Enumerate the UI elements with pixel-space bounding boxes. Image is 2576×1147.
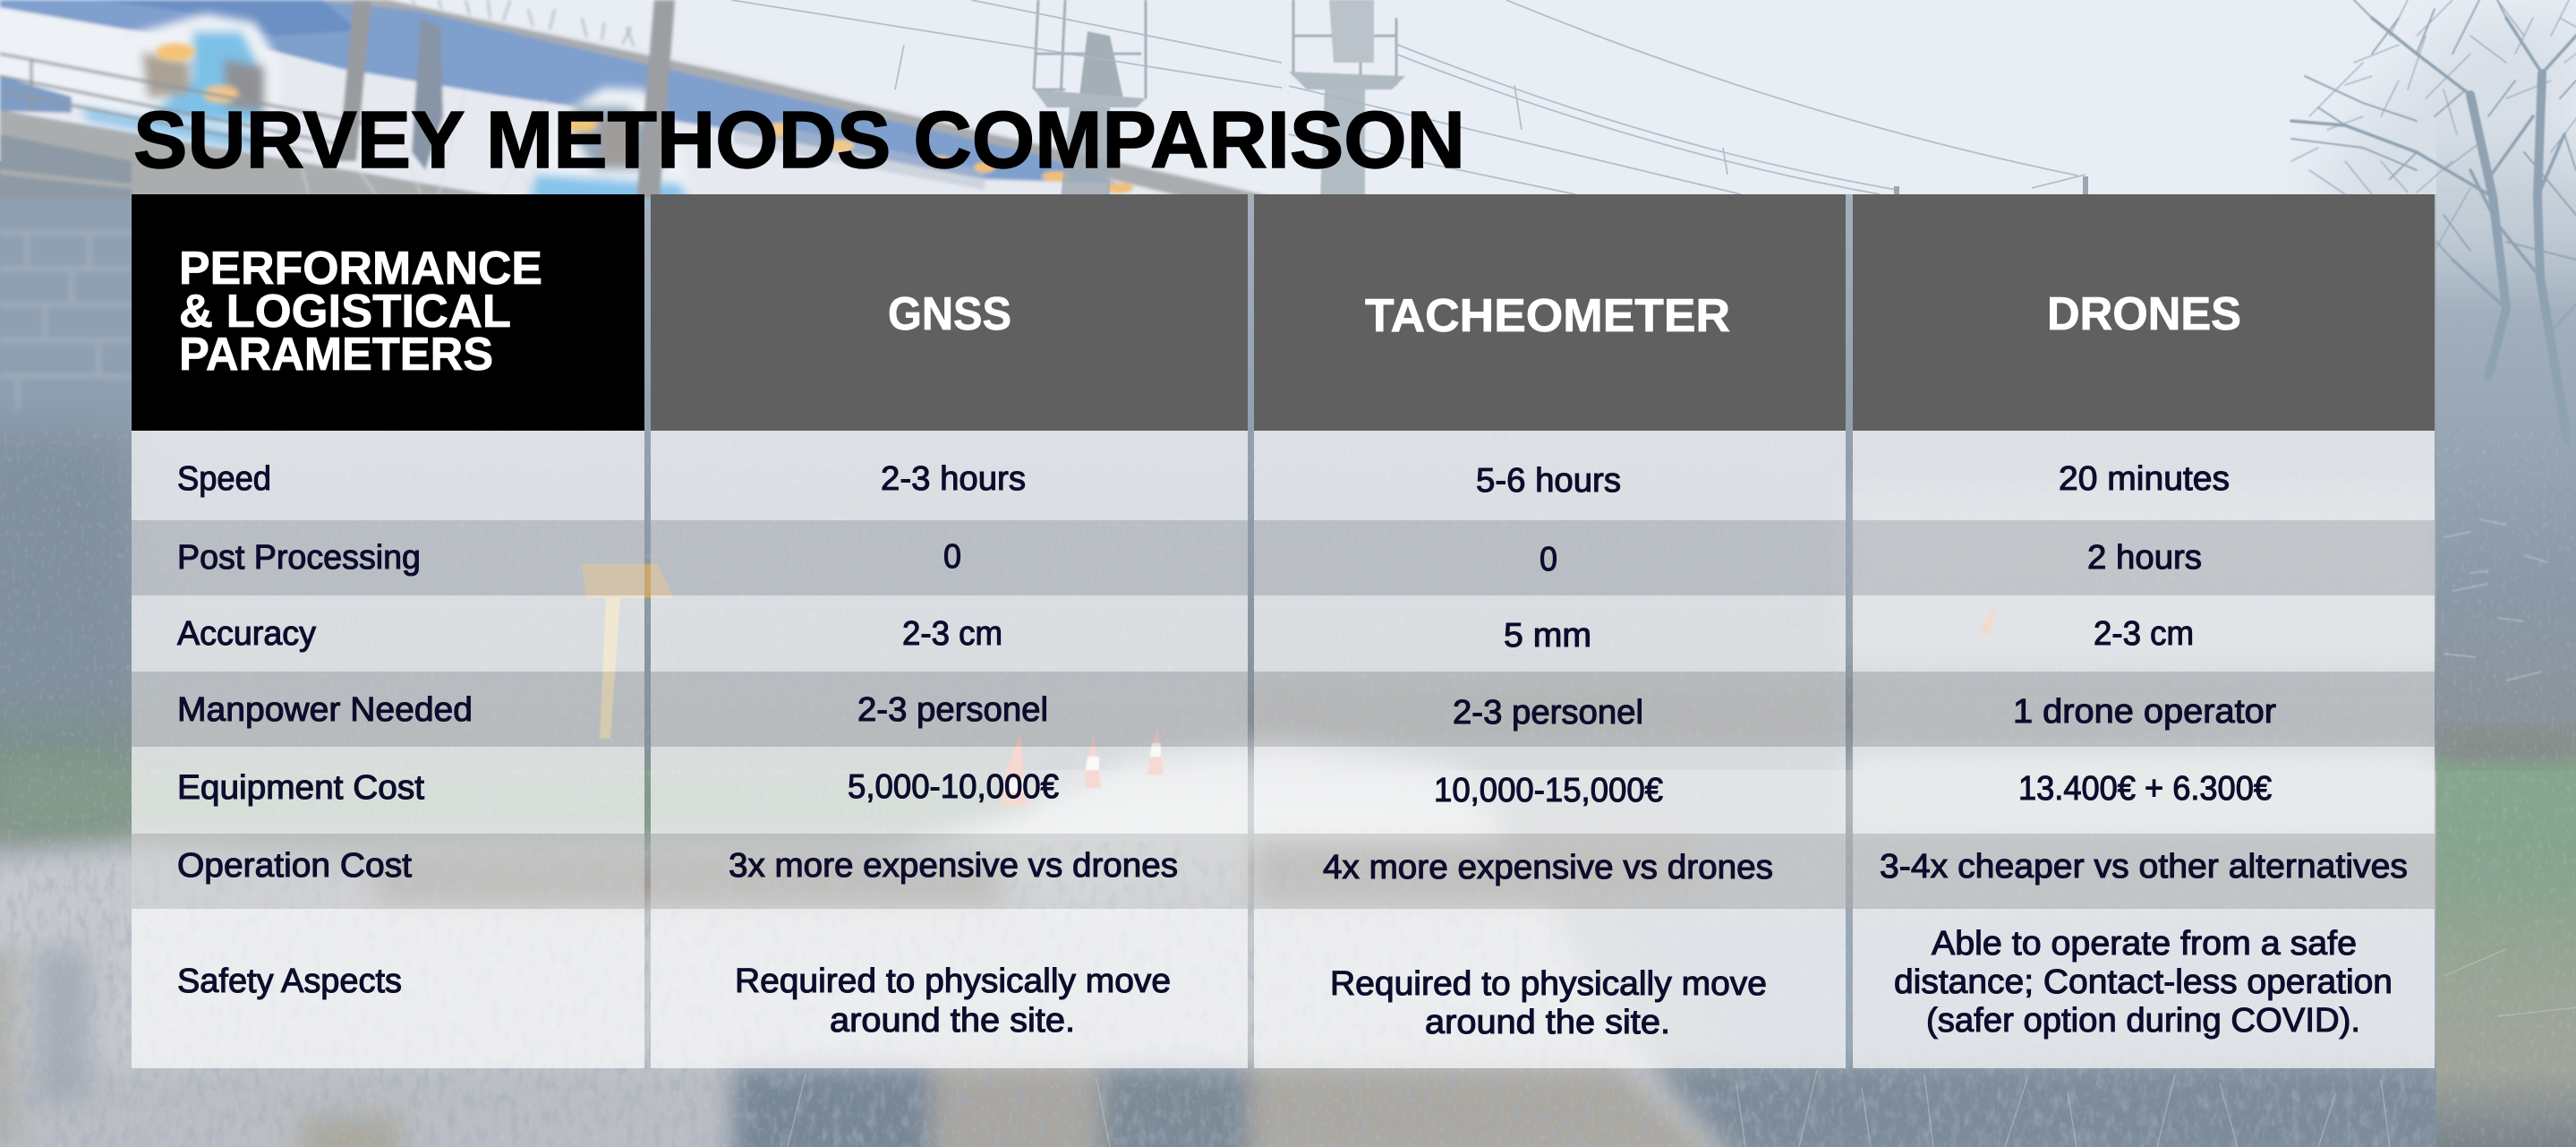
tree crown haze	[2327, 18, 2576, 251]
grey roof	[315, 0, 1282, 199]
row: Manpower Needed: 2-3 personel	[857, 691, 1048, 729]
row: Safety Aspects: Safety Aspects	[177, 963, 402, 1000]
row: Speed: 20 minutes	[2059, 460, 2230, 498]
row: Speed: Speed	[177, 460, 271, 498]
title: SURVEY METHODS COMPARISON	[133, 96, 1465, 185]
header: Tacheometer: TACHEOMETER	[1365, 290, 1730, 342]
railing	[0, 54, 376, 152]
row: Speed	[132, 431, 2435, 520]
row: Operation Cost: 3-4x cheaper vs other alternatives	[1880, 848, 2408, 886]
blue band	[0, 0, 1119, 184]
header: performance and logistical parameters: PARAMETERS	[179, 329, 493, 381]
row: Speed: 2-3 hours	[881, 460, 1026, 498]
green strip and grass behind table	[0, 761, 1029, 837]
dry grass stems	[788, 949, 2576, 1147]
row: Equipment Cost: 13.400€ + 6.300€	[2018, 770, 2272, 808]
poles	[338, 0, 371, 161]
row: Equipment Cost: 5,000-10,000€	[848, 768, 1059, 806]
bridge deck	[0, 110, 515, 199]
signal towers	[1034, 0, 1405, 199]
row: Post Processing: Post Processing	[177, 539, 421, 577]
header: GNSS: GNSS	[888, 288, 1011, 340]
row: Equipment Cost: Equipment Cost	[177, 769, 424, 807]
comparison table	[132, 194, 2435, 1068]
row: Operation Cost: 3x more expensive vs drones	[729, 847, 1178, 885]
row: Safety Aspects: distance; Contact-less operation	[1894, 963, 2393, 1001]
header: performance and logistical parameters	[132, 194, 644, 431]
row: Post Processing: 0	[943, 538, 961, 576]
pale leaves in the hedge	[2444, 519, 2547, 680]
sign post	[582, 564, 673, 739]
header: performance and logistical parameters: PERFORMANCE	[179, 243, 542, 295]
row: Accuracy: Accuracy	[177, 615, 316, 653]
row: Accuracy: 2-3 cm	[902, 615, 1002, 653]
row: Equipment Cost: 10,000-15,000€	[1434, 772, 1663, 809]
train front	[81, 13, 282, 152]
row: Safety Aspects: Required to physically move	[1330, 965, 1767, 1003]
row: Operation Cost	[132, 834, 2435, 909]
right side fog and trees	[2436, 116, 2576, 770]
row: Safety Aspects: around the site.	[1425, 1004, 1670, 1041]
header: Drones: DRONES	[2047, 288, 2241, 340]
grain texture	[0, 430, 2576, 1147]
header: Tacheometer	[1254, 194, 1846, 431]
overhead wires	[731, 0, 2086, 194]
row: Post Processing: 0	[1540, 541, 1557, 578]
white carriage side	[0, 9, 125, 116]
right bank behind table	[1611, 484, 2444, 1083]
row: Post Processing	[132, 520, 2435, 595]
row: Accuracy: 5 mm	[1504, 617, 1591, 655]
row: Safety Aspects: Able to operate from a safe	[1932, 925, 2357, 963]
header: Drones	[1853, 194, 2435, 431]
row: Equipment Cost	[132, 747, 2435, 834]
second train front	[528, 88, 689, 201]
row: Manpower Needed	[132, 672, 2435, 747]
lower ground base	[0, 770, 2576, 1147]
row: Manpower Needed: Manpower Needed	[177, 691, 473, 729]
row: Operation Cost: 4x more expensive vs drones	[1323, 849, 1773, 886]
dark carriage junction	[412, 18, 443, 170]
shrubs in front of bridge	[286, 90, 546, 194]
blue lower strip	[0, 76, 72, 113]
train and bridge	[0, 0, 1282, 201]
bottom strip of dirt and brush	[0, 949, 2452, 1147]
row: Safety Aspects	[132, 909, 2435, 1068]
row: Accuracy	[132, 595, 2435, 672]
row: Operation Cost: Operation Cost	[177, 847, 412, 885]
bare shrubs on the bridge	[412, 0, 640, 63]
left foggy hedge	[0, 430, 134, 842]
orange fence tip	[1980, 598, 1998, 636]
row: Safety Aspects: (safer option during COVID).	[1926, 1002, 2360, 1040]
row: Accuracy: 2-3 cm	[2094, 615, 2194, 653]
row: Post Processing: 2 hours	[2087, 539, 2202, 577]
row: Manpower Needed: 2-3 personel	[1453, 694, 1643, 732]
header: performance and logistical parameters: & LOGISTICAL	[179, 286, 511, 338]
row: Speed: 5-6 hours	[1476, 462, 1621, 500]
train body	[0, 0, 1282, 199]
carriage windows and lights	[734, 116, 985, 190]
row: Safety Aspects: Required to physically move	[735, 963, 1171, 1000]
traffic cones	[1001, 727, 1164, 806]
row: Manpower Needed: 1 drone operator	[2013, 693, 2276, 731]
header: GNSS	[651, 194, 1248, 431]
soil ground left	[0, 680, 1844, 1147]
fog and vegetation behind the table	[0, 194, 2436, 785]
tree branches	[2291, 0, 2576, 439]
row: Safety Aspects: around the site.	[830, 1002, 1075, 1040]
bridge wall	[0, 161, 143, 430]
